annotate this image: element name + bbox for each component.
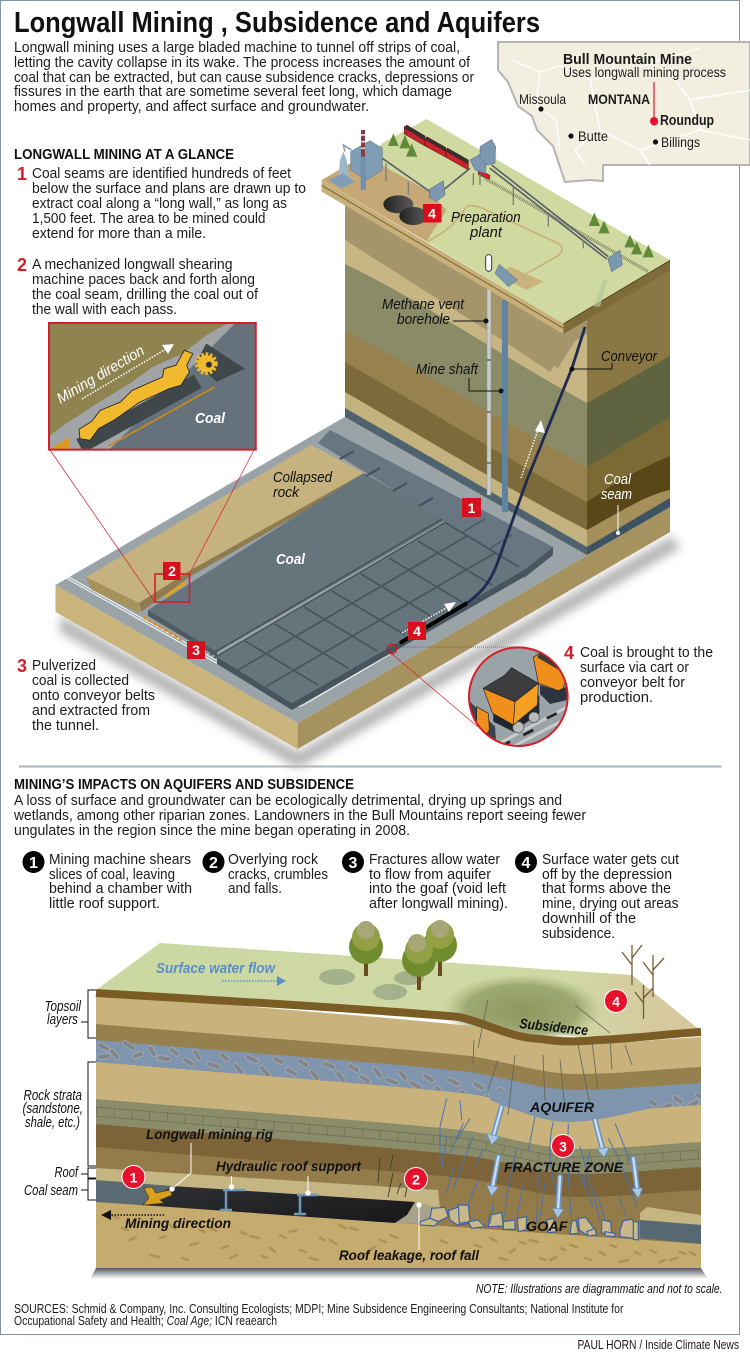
subsidence depression bbox=[442, 974, 602, 1046]
surface soil line bbox=[96, 993, 701, 1041]
aquifer rocks bbox=[100, 1043, 701, 1114]
tree shadows bbox=[319, 969, 424, 1000]
impact step 1: behind a chamber with bbox=[49, 881, 192, 897]
map labels: Roundup bbox=[660, 113, 714, 129]
impact step 1: Mining machine shears bbox=[49, 852, 191, 868]
inset: coal carts bbox=[468, 646, 569, 747]
labels on the mine illustration: Conveyor bbox=[601, 349, 658, 365]
conveyor belts, orange bbox=[143, 617, 388, 697]
intro text bbox=[14, 40, 474, 115]
map labels: Butte bbox=[578, 129, 608, 144]
map labels bbox=[519, 52, 726, 150]
labels on the mine illustration: Mine shaft bbox=[416, 362, 479, 378]
impact step 2: cracks, crumbles bbox=[228, 867, 328, 883]
impacts intro text: A loss of surface and groundwater can be ecologically detrimental, drying up springs and bbox=[14, 793, 562, 809]
labels on the mine illustration bbox=[273, 210, 658, 568]
map labels: Missoula bbox=[519, 92, 566, 107]
pillar strip by the wall bbox=[318, 430, 553, 578]
coal rubble band bbox=[80, 381, 198, 446]
second cart bbox=[540, 685, 567, 704]
locator map of Montana bbox=[498, 42, 750, 182]
aquifer and subsidence diagram bbox=[90, 920, 708, 1278]
layer brackets bbox=[81, 990, 96, 1200]
sources bbox=[14, 1302, 624, 1328]
layer labels: shale, etc.) bbox=[25, 1115, 80, 1131]
rock bedding lines bbox=[96, 1107, 701, 1166]
labels on the mine illustration: Preparation bbox=[451, 210, 521, 226]
layer labels: (sandstone, bbox=[22, 1101, 83, 1117]
leader lines bbox=[453, 319, 620, 535]
step markers on illustration: 2 bbox=[168, 563, 176, 579]
inset labels: Coal bbox=[195, 411, 226, 427]
impact step 3: to flow from aquifer bbox=[369, 867, 491, 883]
water flow arrows bbox=[487, 1107, 643, 1218]
impacts intro text: wetlands, among other riparian zones. Landowners in the Bull Mountains report seeing fewer bbox=[13, 808, 586, 824]
step 4 text: production. bbox=[580, 690, 653, 706]
diagram labels: Longwall mining rig bbox=[146, 1126, 273, 1142]
diagram labels: GOAF bbox=[526, 1218, 568, 1234]
labels on the mine illustration: Collapsed bbox=[273, 470, 333, 486]
impact step 3 bbox=[342, 851, 508, 912]
step 1 text bbox=[17, 164, 306, 242]
cutter drum bbox=[197, 355, 215, 372]
coal seam left bbox=[96, 1180, 172, 1205]
impact step 2 bbox=[202, 851, 328, 897]
vent cap bbox=[486, 255, 492, 271]
rails along the tunnel bbox=[66, 576, 392, 706]
labels on the mine illustration: plant bbox=[469, 225, 503, 241]
mine shaft bbox=[502, 300, 508, 512]
ground shadow bbox=[60, 536, 680, 768]
impact step 4: Surface water gets cut bbox=[542, 852, 679, 868]
tree 1 bbox=[349, 921, 383, 976]
impact step 4: that forms above the bbox=[542, 881, 671, 897]
trees bbox=[388, 133, 654, 257]
step 4 text: Coal is brought to the bbox=[580, 645, 713, 661]
goaf rubble bbox=[420, 1205, 638, 1240]
step 4 text: surface via cart or bbox=[580, 660, 689, 676]
impact step 3: into the goaf (void left bbox=[369, 881, 506, 897]
map city markers bbox=[538, 106, 658, 145]
step 1 text: Coal seams are identified hundreds of feet bbox=[32, 166, 291, 182]
step markers on illustration: 1 bbox=[468, 500, 476, 516]
impact step 4 bbox=[515, 851, 679, 942]
step 3 text: Pulverized bbox=[32, 658, 96, 674]
rail track bbox=[485, 178, 648, 272]
base slab bbox=[56, 417, 670, 749]
impact step 1: 1 bbox=[29, 855, 38, 872]
title: Longwall Mining , Subsidence and Aquifers bbox=[14, 7, 540, 39]
layer labels: Rock strata bbox=[24, 1088, 82, 1104]
impact step 1: slices of coal, leaving bbox=[49, 867, 175, 883]
impact step 2: and falls. bbox=[228, 881, 282, 897]
labels on the mine illustration: Methane vent bbox=[382, 297, 465, 313]
layer labels bbox=[22, 999, 83, 1199]
coal direction arrows bbox=[402, 420, 545, 633]
impact step 1 bbox=[22, 851, 192, 912]
dead trees bbox=[622, 945, 664, 1019]
numbered circles on diagram: 3 bbox=[559, 1138, 567, 1154]
step 3 text: and extracted from bbox=[32, 703, 150, 719]
map labels: Bull Mountain Mine bbox=[563, 52, 692, 68]
impact step 3: Fractures allow water bbox=[369, 852, 500, 868]
step markers on illustration bbox=[163, 204, 481, 659]
step 2 text: the wall with each pass. bbox=[32, 302, 177, 318]
step 3 text: the tunnel. bbox=[32, 718, 99, 734]
step 1 text: 1 bbox=[17, 164, 27, 184]
access road bbox=[427, 206, 562, 273]
impact step 4: off by the depression bbox=[542, 867, 672, 883]
intro text: coal that can be extracted, but can cause subsidence cracks, depressions or bbox=[14, 70, 474, 86]
red zoom connectors bbox=[50, 450, 525, 727]
diagram labels: Roof leakage, roof fall bbox=[339, 1247, 480, 1263]
diagram labels: Hydraulic roof support bbox=[216, 1158, 362, 1174]
impact step 4: mine, drying out areas bbox=[542, 896, 678, 912]
layer labels: Roof bbox=[54, 1165, 80, 1181]
diagram labels: AQUIFER bbox=[529, 1099, 595, 1115]
bottom speckles bbox=[110, 1215, 695, 1262]
power plant bbox=[328, 130, 382, 190]
impact step 2: 2 bbox=[209, 855, 218, 872]
sources: SOURCES: Schmid & Company, Inc. Consulting Ecologists; MDPI; Mine Subsidence Engineering Consultants; National Institute for bbox=[14, 1302, 624, 1316]
aquifer bulge bbox=[490, 1090, 650, 1122]
methane vent borehole bbox=[487, 285, 491, 495]
labels on the mine illustration: Coal bbox=[276, 552, 306, 568]
step 3 text: onto conveyor belts bbox=[32, 688, 155, 704]
step markers on illustration: 3 bbox=[192, 642, 200, 658]
tall strata block, right face bbox=[587, 270, 670, 555]
collapsed rock bbox=[86, 445, 366, 613]
fall wedge bbox=[395, 1202, 440, 1224]
diagram leader lines bbox=[170, 1143, 421, 1250]
step markers on illustration: 4 bbox=[428, 206, 436, 222]
plateau with preparation plant bbox=[322, 119, 670, 334]
water fractures bbox=[440, 1098, 637, 1223]
intro text: homes and property, and affect surface and groundwater. bbox=[14, 99, 369, 115]
labels on the mine illustration: borehole bbox=[397, 312, 450, 328]
labels on the mine illustration: Coal bbox=[604, 472, 632, 488]
impact step 4: 4 bbox=[522, 855, 531, 872]
map labels: MONTANA bbox=[588, 92, 650, 107]
bottom rock bbox=[96, 1202, 701, 1268]
numbered circles on diagram: 4 bbox=[612, 994, 620, 1010]
impact step 3: 3 bbox=[349, 855, 358, 872]
tall strata block, left face bbox=[345, 205, 587, 555]
impact step 4: downhill of the bbox=[542, 911, 636, 927]
step 1 text: 1,500 feet. The area to be mined could bbox=[32, 211, 266, 227]
roof band bbox=[96, 1168, 440, 1208]
strata layers bbox=[96, 997, 701, 1244]
step 2 text: the coal seam, drilling the coal out of bbox=[32, 287, 259, 303]
shearer machine bbox=[79, 350, 193, 440]
flow arrows bbox=[101, 976, 286, 1220]
divider bbox=[19, 766, 722, 768]
layer labels: Coal seam bbox=[24, 1183, 78, 1199]
tree 2 bbox=[402, 934, 436, 990]
step 1 text: extract coal along a “long wall,” as long as bbox=[32, 196, 287, 212]
step 2 text bbox=[17, 255, 259, 318]
right coal seam bbox=[640, 1207, 701, 1244]
numbered circles on diagram: 1 bbox=[130, 1170, 138, 1186]
step markers on illustration: 4 bbox=[413, 623, 421, 639]
third cart bbox=[477, 707, 489, 737]
rubble by the cutter bbox=[196, 344, 245, 382]
impacts intro text bbox=[13, 793, 586, 839]
overhead conveyors bbox=[380, 157, 608, 259]
impact step 2: Overlying rock bbox=[228, 852, 319, 868]
impacts intro text: ungulates in the region since the mine began operating in 2008. bbox=[14, 823, 410, 839]
diagram labels: Mining direction bbox=[125, 1215, 231, 1231]
numbered circles on diagram bbox=[122, 990, 628, 1190]
main cart bbox=[483, 688, 515, 725]
heading: impacts: MINING’S IMPACTS ON AQUIFERS AND SUBSIDENCE bbox=[14, 777, 354, 793]
labels on the mine illustration: rock bbox=[273, 485, 300, 501]
inset: longwall shearer bbox=[48, 322, 258, 455]
step 4 text: 4 bbox=[564, 643, 574, 663]
mining rig bbox=[143, 1187, 172, 1205]
cracks above the roof bbox=[378, 1155, 407, 1197]
intro text: fissures in the earth that are sometime several feet long, which damage bbox=[14, 84, 452, 100]
numbered circles on diagram: 2 bbox=[412, 1172, 420, 1188]
map pin: Roundup bbox=[650, 82, 658, 126]
coal piles bbox=[383, 195, 427, 225]
hydraulic roof supports bbox=[220, 1190, 318, 1214]
diagram labels: Surface water flow bbox=[156, 961, 277, 977]
inset labels: Mining direction bbox=[54, 342, 148, 407]
diagram labels: Subsidence bbox=[519, 1015, 589, 1038]
step 3 text: coal is collected bbox=[32, 673, 129, 689]
land surface bbox=[96, 943, 701, 1040]
impact step 4: subsidence. bbox=[542, 926, 615, 942]
impact step 1: little roof support. bbox=[49, 896, 160, 912]
map labels: Uses longwall mining process bbox=[563, 65, 726, 80]
diagram labels bbox=[125, 961, 624, 1263]
shadow under plateau bbox=[345, 205, 587, 372]
small locator box bbox=[155, 574, 190, 602]
step 1 text: below the surface and plans are drawn up to bbox=[32, 181, 306, 197]
trestles bbox=[386, 163, 583, 248]
heading: longwall mining at a glance: LONGWALL MINING AT A GLANCE bbox=[14, 147, 234, 163]
coal train bbox=[404, 125, 490, 179]
inset labels bbox=[54, 342, 226, 427]
map labels: Billings bbox=[661, 135, 700, 150]
step 2 text: 2 bbox=[17, 255, 27, 275]
coal pillar grid bbox=[217, 523, 524, 710]
diagram labels: FRACTURE ZONE bbox=[504, 1159, 624, 1175]
step 3 text bbox=[17, 656, 155, 734]
step 4 text: conveyor belt for bbox=[580, 675, 685, 691]
mine cross-section illustration bbox=[56, 119, 680, 768]
surface cracks bbox=[473, 1000, 632, 1115]
conveyor bbox=[400, 327, 585, 643]
labels on the mine illustration: seam bbox=[601, 487, 632, 503]
step 3 text: 3 bbox=[17, 656, 27, 676]
coal panel bbox=[148, 473, 446, 658]
step 4 text bbox=[564, 643, 713, 706]
tree 3 bbox=[423, 920, 457, 976]
preparation buildings bbox=[429, 139, 622, 287]
step 2 text: A mechanized longwall shearing bbox=[32, 257, 232, 273]
layer labels: Topsoil bbox=[44, 999, 82, 1015]
impact step 3: after longwall mining). bbox=[369, 896, 508, 912]
mined void bbox=[142, 1186, 415, 1223]
layer labels: layers bbox=[47, 1012, 78, 1028]
sources: Occupational Safety and Health; Coal Age; ICN reaearch bbox=[14, 1314, 277, 1328]
step 1 text: extend for more than a mile. bbox=[32, 226, 206, 242]
intro text: Longwall mining uses a large bladed machine to tunnel off strips of coal, bbox=[14, 40, 460, 56]
step 2 text: machine paces back and forth along bbox=[32, 272, 255, 288]
diagram shadow bbox=[90, 1268, 708, 1279]
intro text: letting the cavity collapse in its wake. The process increases the amount of bbox=[14, 55, 471, 71]
